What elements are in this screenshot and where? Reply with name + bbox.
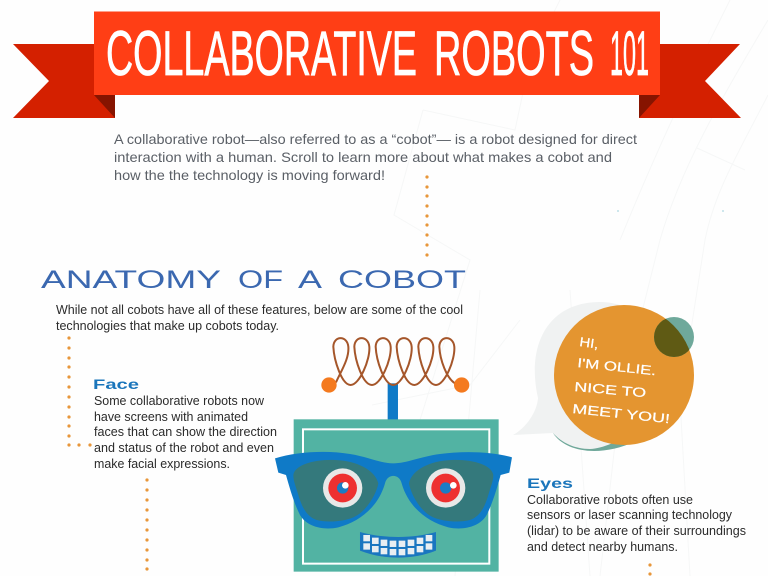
left lens [293, 460, 378, 521]
eyes description: Collaborative robots often use [527, 493, 693, 507]
dotted connector: below eyes [648, 563, 652, 576]
screen outline [303, 429, 489, 564]
bubble back [513, 302, 672, 449]
robot illustration [275, 338, 512, 572]
title: ROBOTS [434, 19, 594, 89]
bubble text: MEET YOU! [572, 401, 671, 426]
face heading: Face [93, 376, 139, 392]
intro text: interaction with a human. Scroll to learn more about what makes a cobot and [114, 149, 612, 165]
eyes heading: Eyes [527, 475, 573, 491]
anatomy intro text [56, 303, 463, 333]
eyes feature block [527, 475, 746, 554]
face description [94, 394, 277, 471]
dotted connector: below face [145, 478, 149, 571]
bubble text: NICE TO [574, 379, 647, 400]
banner panel [94, 12, 660, 95]
banner ribbon [13, 12, 741, 118]
section heading: anatomy of a cobot: OF [238, 266, 283, 294]
face description: make facial expressions. [94, 457, 230, 471]
face description: and status of the robot and even [94, 441, 274, 455]
left ribbon tail [13, 44, 115, 118]
dotted connector: anatomy to face [67, 336, 92, 447]
robot head [294, 419, 499, 572]
bubble orange circle [554, 305, 694, 445]
circle overlap [654, 318, 690, 357]
section heading: anatomy of a cobot: A [298, 266, 322, 294]
antenna neck [388, 383, 398, 420]
bubble text: I'M OLLIE. [577, 355, 657, 378]
face description: Some collaborative robots now [94, 394, 265, 408]
intro text [114, 131, 637, 183]
bubble shadow [553, 430, 636, 451]
intro text: how the the technology is moving forward! [114, 167, 385, 183]
intro text: A collaborative robot—also referred to as a “cobot”— is a robot designed for direct [114, 131, 637, 147]
right ribbon fold [639, 95, 660, 118]
mouth [360, 532, 436, 558]
left ribbon fold [94, 95, 115, 118]
title: COLLABORATIVE [106, 19, 417, 89]
face feature block [93, 376, 277, 471]
antenna right ball [454, 377, 469, 393]
section heading: anatomy of a cobot: ANATOMY [41, 266, 221, 294]
face description: have screens with animated [94, 410, 248, 424]
banner ribbon: 101 [610, 19, 649, 89]
right lens [409, 460, 493, 521]
speech bubble [513, 302, 694, 451]
bubble text: HI, [579, 334, 599, 352]
glasses frame [275, 452, 512, 528]
eyes description: and detect nearby humans. [527, 540, 678, 554]
antenna left ball [321, 377, 337, 393]
left eye [323, 468, 362, 508]
antenna coil [333, 338, 455, 385]
anatomy intro text: technologies that make up cobots today. [56, 319, 279, 333]
face description: faces that can show the direction [94, 425, 277, 439]
specks [617, 210, 724, 212]
eyes description: (lidar) to be aware of their surroundings [527, 524, 746, 538]
bubble text [572, 334, 671, 426]
right ribbon tail [639, 44, 741, 118]
small teal circle [654, 317, 694, 357]
eyes description: sensors or laser scanning technology [527, 508, 733, 522]
section heading: anatomy of a cobot [41, 266, 466, 294]
dotted connector: intro to anatomy [425, 175, 429, 257]
right eye [426, 468, 465, 508]
anatomy intro text: While not all cobots have all of these features, below are some of the cool [56, 303, 463, 317]
section heading: anatomy of a cobot: COBOT [338, 266, 466, 294]
eyes description [527, 493, 746, 554]
